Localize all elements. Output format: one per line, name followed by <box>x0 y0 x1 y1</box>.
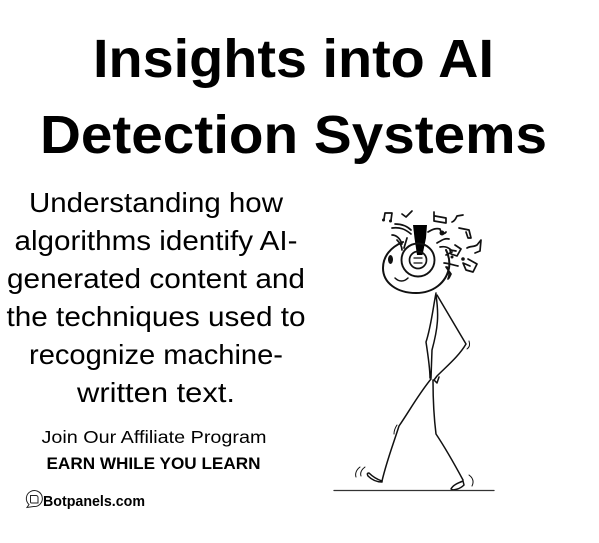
eye and mouth <box>388 255 408 281</box>
description text: generated content and <box>7 263 305 294</box>
title: Insights into AI <box>93 29 494 89</box>
torso and arm <box>426 293 466 383</box>
ground line <box>334 490 494 492</box>
back leg <box>382 379 431 481</box>
logo: Botpanels.com <box>26 491 145 510</box>
illustration: stick figure walking with headphones <box>334 211 494 490</box>
motion marks <box>356 425 473 486</box>
title <box>40 29 547 165</box>
description text: recognize machine- <box>29 339 283 370</box>
wordmark: Botpanels.com <box>43 494 145 510</box>
head <box>383 242 449 293</box>
front foot <box>451 481 464 490</box>
title: Detection Systems <box>40 105 547 165</box>
front leg <box>433 380 463 480</box>
description text: the techniques used to <box>6 301 306 332</box>
description text: Understanding how <box>29 187 283 218</box>
affiliate program text: Join Our Affiliate Program <box>42 427 266 447</box>
headphones <box>402 225 434 276</box>
description text: written text. <box>76 377 235 408</box>
description text: algorithms identify AI- <box>14 225 298 256</box>
hair and music notes <box>382 211 481 279</box>
back foot <box>367 473 382 482</box>
earn while you learn: EARN WHILE YOU LEARN <box>46 454 260 473</box>
description text <box>6 187 306 408</box>
icon: chat bubble <box>26 491 42 508</box>
